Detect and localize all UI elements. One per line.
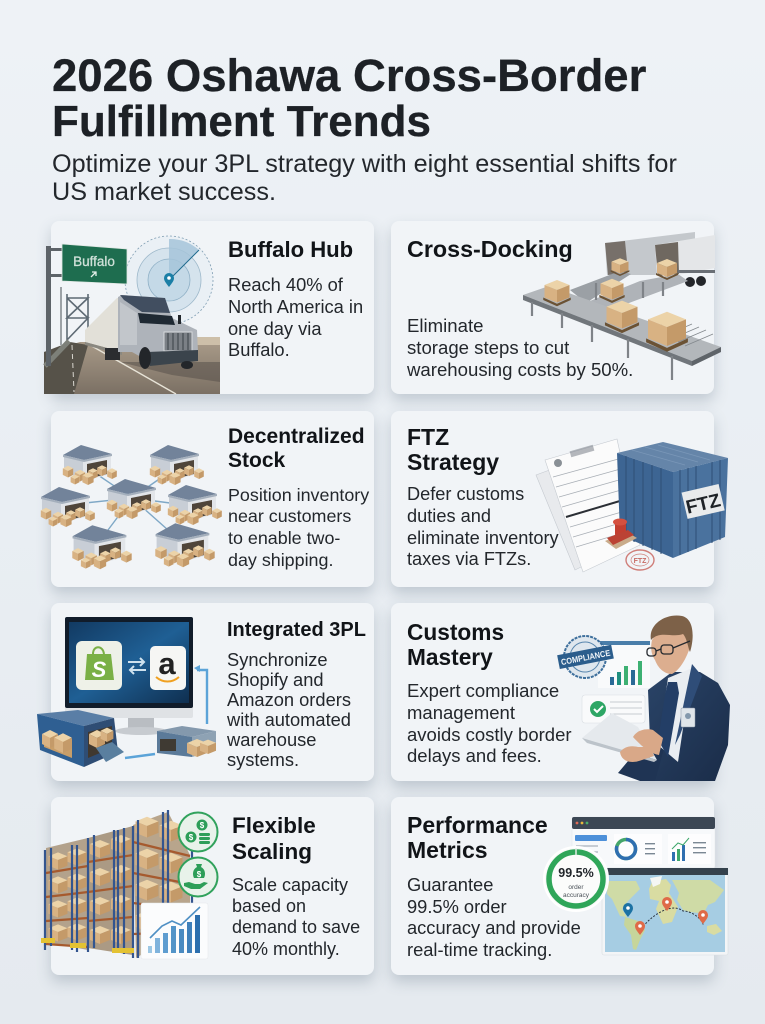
illustration: monitor with Shopify and Amazon, warehouses: a xyxy=(158,646,176,681)
text: Synchronize xyxy=(227,649,328,670)
illustration: customs officer with compliance badge xyxy=(557,616,730,781)
heading xyxy=(407,424,499,475)
text: North America in xyxy=(228,296,363,317)
panel: Flexible Scaling xyxy=(51,797,374,975)
heading: Scaling xyxy=(232,838,312,864)
illustration: warehouse network xyxy=(40,445,222,570)
text: warehouse xyxy=(227,729,316,750)
text: Scale capacity xyxy=(232,875,348,895)
heading: Stock xyxy=(228,449,285,472)
heading xyxy=(407,618,504,670)
text: storage steps to cut xyxy=(407,337,569,358)
illustration: dashboard, accuracy ring and map: 99.5% xyxy=(558,866,594,880)
illustration: monitor with Shopify and Amazon, warehouses xyxy=(37,617,216,767)
illustration: warehouse racks with savings icons and chart: $ xyxy=(200,821,205,830)
text: delays and fees. xyxy=(407,745,542,766)
text xyxy=(227,649,351,770)
panel: Performance Metrics xyxy=(391,797,714,975)
illustration: dashboard, accuracy ring and map: accuracy xyxy=(563,892,590,899)
heading: FTZ xyxy=(407,424,449,450)
heading xyxy=(407,812,548,863)
text: near customers xyxy=(228,506,351,526)
text: 40% monthly. xyxy=(232,939,340,959)
stamp xyxy=(554,631,616,683)
heading: Flexible xyxy=(232,812,316,838)
illustration: conveyors and trucks xyxy=(523,232,721,380)
illustration: warehouse racks with savings icons and chart: $ xyxy=(197,870,202,879)
title xyxy=(52,50,646,146)
heading: Performance xyxy=(407,812,548,838)
text: Reach 40% of xyxy=(228,274,343,295)
illustration: customs documents and FTZ container xyxy=(536,438,728,572)
heading: Metrics xyxy=(407,837,488,863)
title: 2026 Oshawa Cross-Border xyxy=(52,50,646,100)
text xyxy=(407,315,633,380)
subtitle: US market success. xyxy=(52,178,276,206)
truck xyxy=(85,295,198,369)
text xyxy=(228,484,370,570)
illustration: customs documents and FTZ container: FTZ xyxy=(634,558,647,565)
text: management xyxy=(407,702,515,723)
text: systems. xyxy=(227,749,299,770)
heading: Cross-Docking xyxy=(407,236,573,262)
heading: Customs xyxy=(407,618,504,644)
panel: Integrated 3PL xyxy=(51,603,374,781)
text: accuracy and provide xyxy=(407,917,581,938)
heading: Buffalo Hub xyxy=(228,236,353,262)
heading: Integrated 3PL xyxy=(227,619,366,641)
stamp: COMPLIANCE xyxy=(560,648,611,667)
text: Expert compliance xyxy=(407,680,559,701)
text: eliminate inventory xyxy=(407,528,559,548)
radar xyxy=(125,236,213,324)
text: avoids costly border xyxy=(407,724,572,745)
panel: Buffalo Hub xyxy=(51,221,374,394)
text: demand to save xyxy=(232,917,360,937)
heading: Decentralized xyxy=(228,424,365,448)
heading: Mastery xyxy=(407,644,493,670)
text xyxy=(232,875,360,959)
text: real-time tracking. xyxy=(407,939,552,960)
text: taxes via FTZs. xyxy=(407,549,531,569)
text: Amazon orders xyxy=(227,689,351,710)
text: Shopify and xyxy=(227,669,324,690)
text xyxy=(228,274,363,360)
text xyxy=(407,874,581,960)
title: Fulfillment Trends xyxy=(52,96,431,146)
panel: Decentralized Stock xyxy=(51,411,374,587)
text: Eliminate xyxy=(407,315,483,336)
illustration: warehouse racks with savings icons and chart xyxy=(41,810,218,959)
text: based on xyxy=(232,896,306,916)
text: Buffalo. xyxy=(228,339,290,360)
road sign xyxy=(62,244,127,284)
panel: Customs Mastery xyxy=(391,603,714,781)
text: duties and xyxy=(407,506,491,526)
illustration: truck on bridge with radar xyxy=(43,236,220,394)
text xyxy=(407,484,559,569)
illustration: warehouse racks with savings icons and chart: $ xyxy=(189,833,194,842)
heading: Strategy xyxy=(407,448,499,474)
panel: Cross-Docking xyxy=(391,221,714,394)
text: one day via xyxy=(228,318,322,339)
text: Guarantee xyxy=(407,874,493,895)
text: 99.5% order xyxy=(407,896,507,917)
panel: FTZ Strategy xyxy=(391,411,714,587)
text: with automated xyxy=(227,709,351,730)
heading xyxy=(228,424,365,472)
illustration: dashboard, accuracy ring and map: order xyxy=(568,884,584,891)
illustration: monitor with Shopify and Amazon, warehouses: S xyxy=(92,657,107,682)
text: Position inventory xyxy=(228,484,369,504)
text xyxy=(407,680,572,766)
subtitle: Optimize your 3PL strategy with eight essential shifts for xyxy=(52,150,677,178)
text: day shipping. xyxy=(228,550,333,570)
text: to enable two- xyxy=(228,528,340,548)
text: warehousing costs by 50%. xyxy=(407,359,633,380)
illustration: customs documents and FTZ container: FTZ xyxy=(684,490,723,519)
text: Defer customs xyxy=(407,484,524,504)
heading xyxy=(232,812,316,864)
illustration: dashboard, accuracy ring and map xyxy=(543,817,728,956)
subtitle xyxy=(52,150,677,206)
road sign: Buffalo xyxy=(73,254,115,269)
